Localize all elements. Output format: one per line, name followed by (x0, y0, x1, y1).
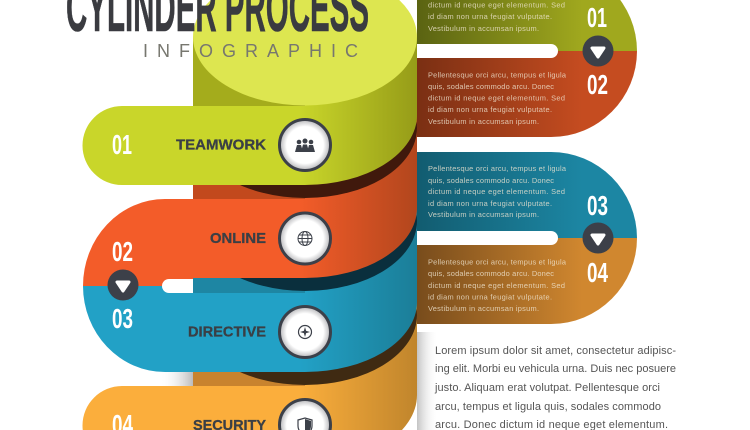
panel: step 02 description: Vestibulum in accumsan ipsum. (428, 117, 539, 126)
panel: step 04 description: quis, sodales commodo arcu. Donec (428, 269, 554, 278)
icon: triangle badge 01/02 (582, 36, 614, 66)
panel: step 01 description: Vestibulum in accumsan ipsum. (428, 24, 539, 33)
cylinder top (193, 0, 417, 106)
band 02 label: ONLINE (210, 230, 266, 247)
band 02 number: 02 (112, 236, 133, 267)
cylinder side (193, 37, 333, 106)
panel: step 02 description: quis, sodales commodo arcu. Donec (428, 82, 554, 91)
paragraph: arcu, tempus et ligula quis, sodales commodo (435, 401, 661, 413)
band 01 label: TEAMWORK (176, 136, 266, 154)
panel: step 03 description: Pellentesque orci arcu, tempus et ligula (428, 164, 567, 173)
panel: step 03 description: 03 (587, 190, 608, 221)
band 03 shadow (240, 309, 417, 385)
band 04 security (83, 300, 417, 430)
slot: white divider 01/02 (405, 44, 558, 58)
panel: step 03 description: dictum id neque eget elementum. Sed (428, 187, 565, 196)
band 01 shadow (240, 122, 417, 198)
panel: step 04 description (417, 238, 637, 324)
icon: triangle badge 03/04 (582, 222, 614, 254)
icon: teamwork (280, 120, 330, 170)
band 02 online (83, 100, 417, 286)
slot: white divider 03/04 (405, 231, 558, 245)
subtitle: INFOGRAPHIC (143, 41, 358, 61)
panel: step 03 description: Vestibulum in accumsan ipsum. (428, 210, 539, 219)
panel: step 04 description: dictum id neque eget elementum. Sed (428, 281, 565, 290)
icon: triangle badge 02/03 (108, 270, 138, 300)
panel: step 01 description: id diam non urna feugiat vulputate. (428, 12, 552, 21)
band 03 directive (83, 200, 417, 372)
panel: step 03 description: id diam non urna feugiat vulputate. (428, 199, 552, 208)
band 01 number: 01 (112, 129, 132, 160)
paragraph (434, 345, 676, 430)
panel: step 04 description: id diam non urna feugiat vulputate. (428, 292, 552, 302)
panel: step 04 description: 04 (587, 257, 608, 288)
band 03 label: DIRECTIVE (188, 324, 266, 340)
panel: step 04 description: Pellentesque orci arcu, tempus et ligula (428, 258, 567, 266)
panel: step 01 description (417, 0, 637, 51)
band 03 number: 03 (112, 303, 133, 334)
icon: globe (280, 213, 330, 264)
paragraph: ing elit. Morbi eu vehicula urna. Duis nec posuere (435, 363, 676, 375)
panel: step 02 description: 02 (587, 69, 608, 100)
panel: step 01 description: 01 (587, 2, 607, 33)
panel: step 01 description: dictum id neque eget elementum. Sed (428, 0, 565, 10)
icon: shield (280, 400, 330, 430)
band 02 shadow (240, 215, 417, 291)
paragraph: Lorem ipsum dolor sit amet, consectetur adipisc- (435, 345, 676, 357)
panel: step 04 description: Vestibulum in accumsan ipsum. (428, 304, 539, 313)
panel: step 02 description: Pellentesque orci arcu, tempus et ligula (428, 70, 567, 80)
panel: step 03 description: quis, sodales commodo arcu. Donec (428, 176, 554, 185)
panel: step 03 description (417, 152, 637, 238)
band 01 teamwork (83, 37, 417, 185)
paragraph: justo. Aliquam erat volutpat. Pellentesque orci (434, 382, 660, 394)
slot: white divider 02/03 (162, 279, 193, 293)
panel: step 02 description: dictum id neque eget elementum. Sed (428, 94, 565, 102)
panel: step 02 description: id diam non urna feugiat vulputate. (428, 105, 552, 114)
icon: compass (280, 306, 330, 358)
cylinder drop shadow (417, 332, 438, 430)
panel: step 02 description (417, 51, 637, 137)
